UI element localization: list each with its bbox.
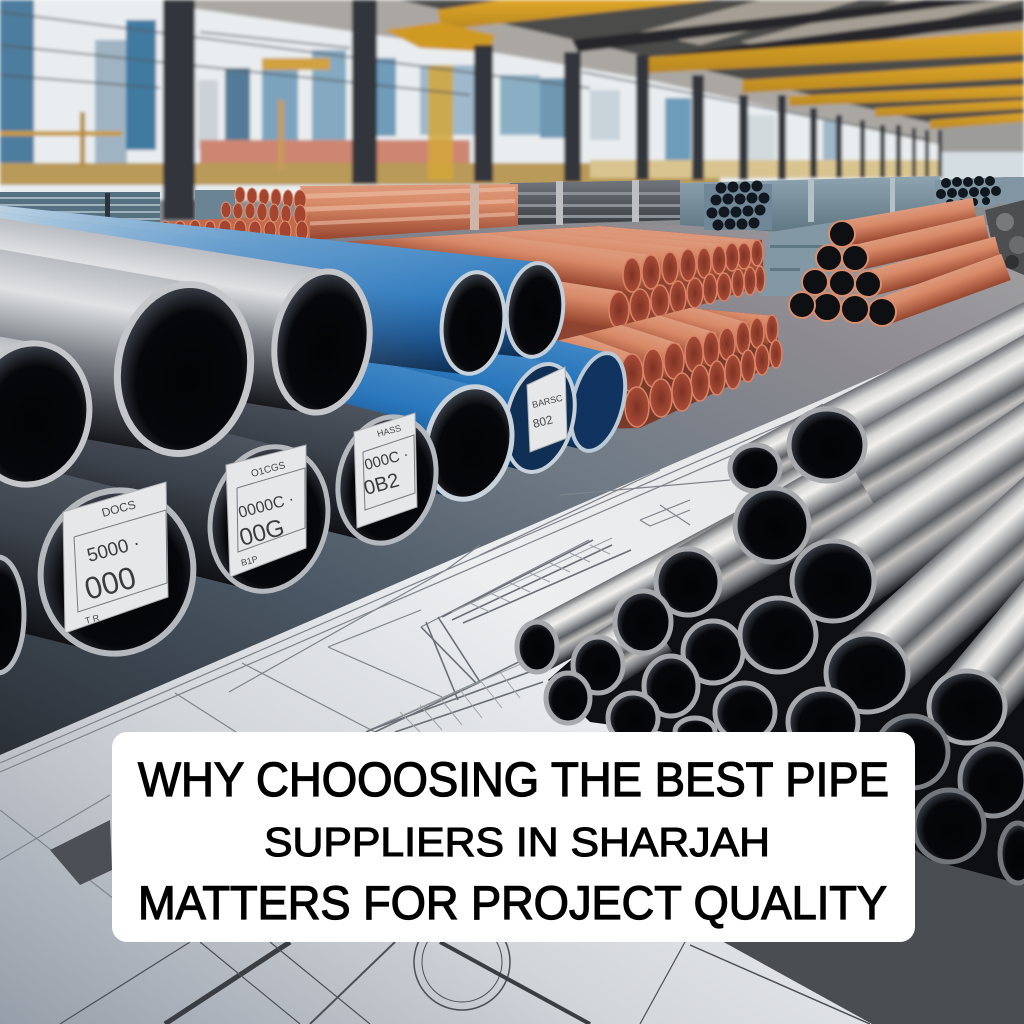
panel: blueprint paper on floor	[0, 312, 1024, 1024]
tag 3	[354, 413, 417, 528]
tag 3: 0B2	[362, 469, 402, 500]
slate pipe 1	[0, 420, 211, 670]
tag 2	[226, 445, 306, 577]
tag 4: 802	[531, 412, 554, 431]
wall strip	[190, 0, 940, 145]
lower copper stack pipe ends	[621, 315, 782, 427]
city skyline buildings	[0, 0, 950, 185]
panel: lower row of labelled pipes	[0, 317, 634, 673]
panel: warehouse background with city view	[0, 0, 1024, 245]
lower copper stack bodies	[558, 308, 778, 428]
blue pipe far	[440, 317, 634, 457]
slate pipe cut off at left	[0, 557, 24, 673]
title line 2: SUPPLIERS IN SHARJAH	[264, 819, 770, 865]
dark floor lower right	[720, 800, 1024, 1024]
tag 1: DOCS	[100, 497, 137, 520]
dark small pipe ends far right	[935, 176, 1024, 208]
silver pipe large	[0, 232, 264, 465]
steel pipe bodies	[525, 293, 1024, 731]
panel: copper pipe stacks centre	[343, 226, 783, 428]
hatched title block	[50, 820, 112, 885]
silver pipe cut off at left	[0, 327, 100, 494]
tag 2: 00G	[237, 514, 287, 552]
tag 1	[63, 482, 168, 633]
grey stack	[510, 180, 680, 225]
tag 1: 5000 ·	[85, 533, 142, 567]
panel: copper stack right	[789, 198, 1011, 330]
tag 2: O1CGS	[250, 460, 287, 480]
yellow overhead crane beams	[385, 0, 1024, 129]
tag 4: BARSC	[531, 393, 564, 410]
blue pipe with tag	[362, 324, 585, 479]
panel: polished steel pipe pile	[517, 293, 1024, 885]
steel blue stack with dark ends	[680, 176, 940, 296]
blue-grey far stack left	[0, 190, 235, 228]
tag 2: B1P	[240, 554, 259, 568]
blue pipe front	[0, 203, 510, 378]
steel pipe ends	[517, 409, 1024, 883]
panel: price tags on pipes	[63, 367, 567, 633]
tag 1: T R	[84, 612, 101, 626]
tag 1: 000	[81, 560, 140, 607]
tag 3: 000C ·	[363, 446, 411, 474]
tag 3: HASS	[376, 423, 402, 439]
ceiling	[380, 0, 1024, 132]
title card	[112, 732, 915, 942]
dark shadow behind pile	[548, 340, 1024, 885]
window mullions	[0, 12, 930, 140]
upper copper stack pipe ends	[609, 240, 765, 328]
blueprint wireframe structure	[366, 540, 631, 732]
paper edge lines	[0, 320, 1024, 935]
blueprint grid hatching	[380, 538, 612, 732]
upper copper stack bodies	[343, 226, 764, 340]
steel columns	[163, 0, 942, 220]
silver pipe medium	[0, 205, 380, 420]
ceiling panels	[640, 0, 1024, 58]
dark roof girders	[572, 0, 1024, 62]
panel: factory floor	[0, 225, 1024, 760]
slate pipe 3	[139, 360, 449, 554]
title line 1: WHY CHOOOSING THE BEST PIPE	[138, 754, 889, 807]
tag 2: 0000C ·	[237, 491, 296, 522]
lower drawing detail: circle and beams	[60, 914, 870, 1024]
blue pipe back	[0, 197, 568, 361]
slate pipe 2	[0, 376, 343, 604]
panel: upper row of large pipes	[0, 197, 568, 494]
rocks and scrap at far right	[985, 200, 1024, 275]
tag 4	[527, 367, 567, 452]
title line 3: MATTERS FOR PROJECT QUALITY	[138, 876, 887, 929]
blue pipe	[290, 347, 524, 508]
copper back stack	[155, 184, 518, 241]
panel: back row of pipe stacks	[0, 176, 1024, 296]
